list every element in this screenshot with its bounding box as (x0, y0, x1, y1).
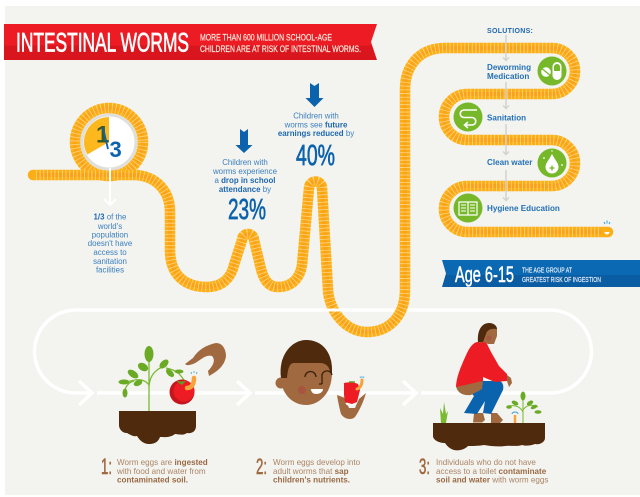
title ribbon (4, 24, 377, 60)
soil (119, 411, 196, 444)
text: one third of population: sanitation (93, 257, 127, 266)
hand (185, 343, 226, 376)
arrow: sanitation (104, 168, 116, 205)
text: one third of population: 1/3 of the (94, 212, 126, 222)
icon: water drop (538, 148, 566, 178)
loop line crossing worm (322, 308, 345, 312)
buttocks (456, 381, 483, 395)
icon: pills (538, 56, 566, 86)
solutions connector (503, 35, 509, 200)
solution labels: Clean water (487, 158, 533, 167)
step text: Individuals who do not have (436, 458, 536, 467)
step text: contaminated soil. (117, 476, 188, 484)
solution labels: Medication (487, 72, 529, 81)
step number: 3: (419, 454, 430, 479)
age ribbon (442, 260, 640, 287)
hair (281, 340, 332, 378)
text: school attendance: attendance by (219, 185, 271, 194)
arrow: school attendance (236, 129, 252, 153)
small worm (512, 412, 518, 423)
one third fraction: 1 (96, 122, 109, 148)
arrow: earnings (306, 83, 324, 107)
subtitle: CHILDREN ARE AT RISK OF INTESTINAL WORMS. (200, 44, 361, 55)
step text: access to a toilet contaminate (436, 467, 546, 476)
text: one third of population: facilities (96, 266, 124, 274)
worm on tomato (187, 371, 197, 388)
subtitle (200, 32, 361, 55)
legs (464, 381, 503, 414)
step 1 (101, 454, 208, 484)
age description: THE AGE GROUP AT (522, 266, 572, 274)
step number: 1: (101, 454, 112, 479)
plant (118, 346, 186, 411)
solution labels: Deworming (487, 63, 531, 72)
tomato (170, 380, 194, 404)
worm body (33, 48, 608, 332)
illustration: boy eating (276, 340, 366, 419)
step text: children's nutrients. (273, 476, 350, 484)
step number: 2: (256, 454, 267, 479)
solution labels: Hygiene Education (487, 204, 560, 213)
text: earnings: Children with (293, 112, 339, 120)
one third fraction (96, 122, 122, 162)
text: earnings: earnings reduced by (278, 129, 354, 138)
life cycle loop arrows (34, 310, 592, 405)
grass (440, 402, 448, 423)
step text: soil and water with worm eggs (436, 476, 548, 484)
subtitle: MORE THAN 600 MILLION SCHOOL-AGE (200, 32, 332, 44)
step text: with food and water from (116, 467, 206, 476)
hair (478, 323, 497, 342)
feet (473, 413, 503, 423)
head (479, 325, 497, 344)
step text: adult worms that sap (273, 467, 349, 476)
icon: book (454, 194, 482, 222)
text: school attendance: Children with (222, 158, 268, 167)
age label: Age 6-15 (455, 262, 514, 287)
text: school attendance: a drop in school (215, 176, 275, 185)
face (281, 360, 332, 405)
age description: GREATEST RISK OF INGESTION (522, 275, 601, 284)
ear (276, 378, 286, 388)
text: school attendance: worms experience (212, 167, 278, 176)
illustration: squatting person (433, 323, 545, 450)
torso and arm (456, 342, 507, 387)
small plant (506, 392, 542, 423)
one third pie chart (82, 115, 136, 169)
step text: Worm eggs are ingested (117, 458, 208, 467)
step 2 (256, 454, 361, 484)
cheek (486, 336, 492, 340)
illustration: plant and tomato (118, 343, 226, 444)
icon: sanitation pipe (454, 102, 482, 132)
step 3 (419, 454, 548, 484)
worm loop ring (75, 108, 143, 176)
text: earnings: worms see future (285, 120, 347, 130)
age description (522, 266, 601, 284)
solutions heading: SOLUTIONS: (487, 28, 533, 35)
text: one third of population: population (92, 230, 128, 240)
stat: 40 percent: 40% (296, 140, 335, 172)
soil (433, 423, 545, 450)
hand with apple (337, 376, 366, 419)
stat: 23 percent: 23% (228, 194, 266, 226)
text: one third of population: access to (93, 248, 127, 257)
worm face (602, 220, 612, 237)
solution labels: Sanitation (487, 114, 526, 122)
solution labels (487, 63, 560, 213)
text: one third of population: world's (97, 222, 122, 231)
hand (507, 375, 512, 387)
facial features (298, 371, 332, 394)
text: one third of population: doesn't have (88, 239, 133, 248)
step text: Worm eggs develop into (273, 458, 361, 467)
title: INTESTINAL WORMS (16, 28, 189, 58)
one third fraction: 3 (110, 137, 122, 162)
